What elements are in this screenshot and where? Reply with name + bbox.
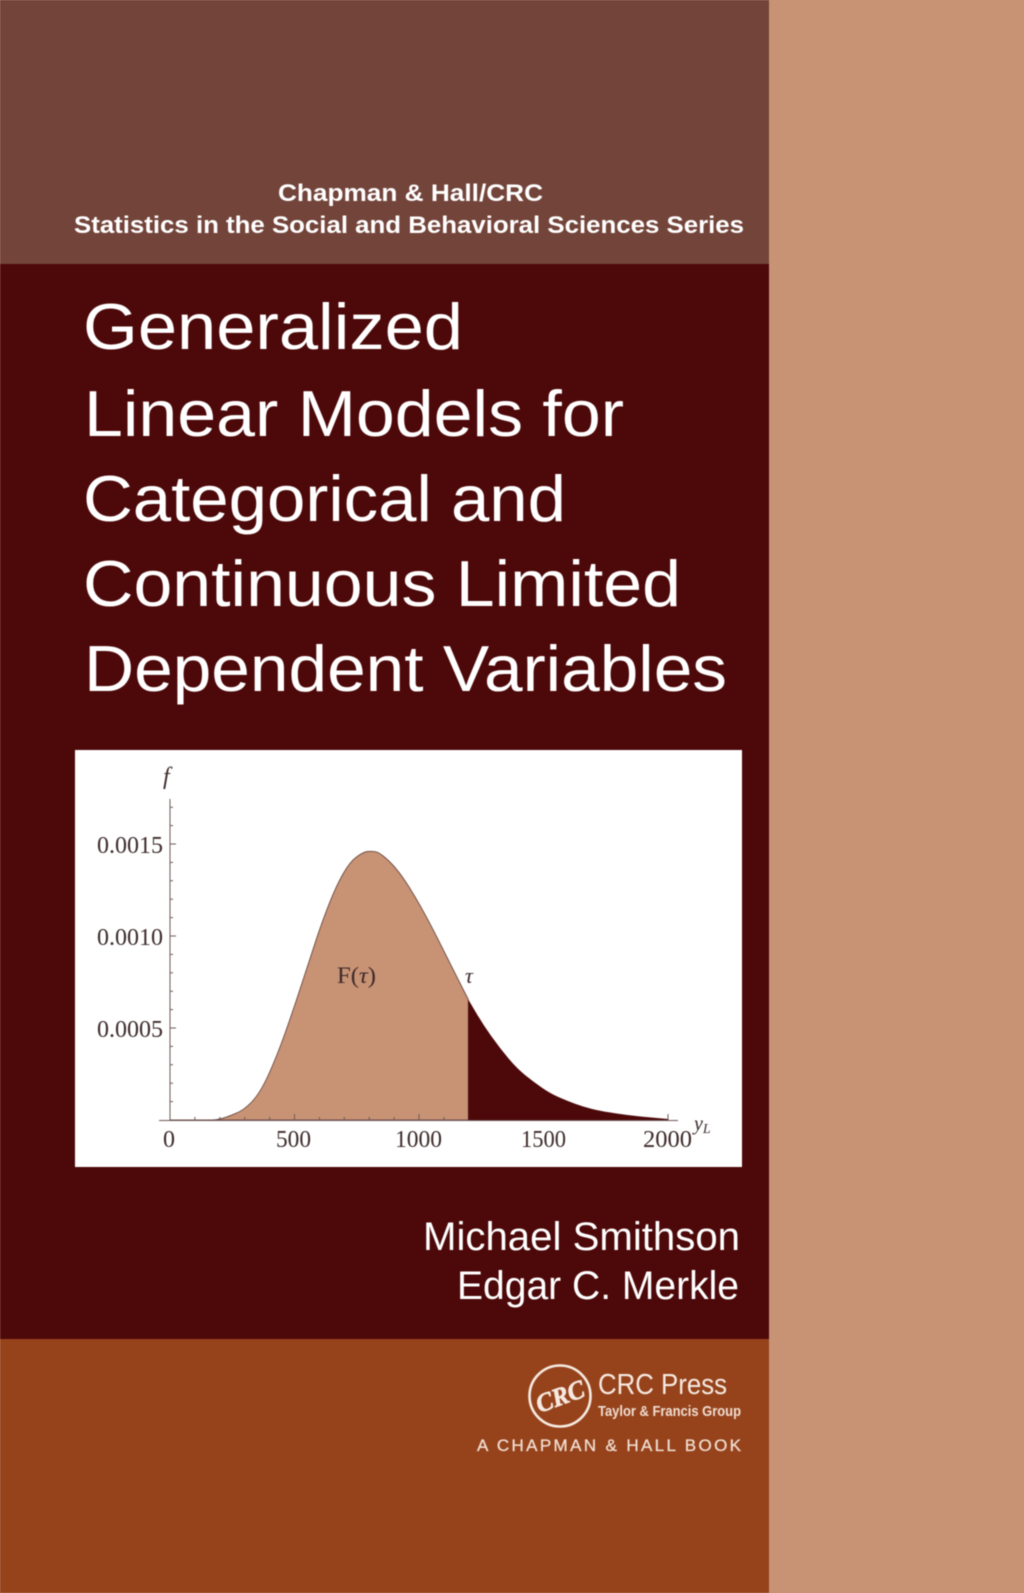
series name: Chapman & Hall/CRC (278, 180, 543, 207)
label: tau: τ (465, 963, 474, 988)
publisher group: Taylor & Francis Group (598, 1403, 741, 1420)
series name: Statistics in the Social and Behavioral Sciences Series (74, 212, 744, 239)
axis title: f: f (163, 764, 173, 790)
axes (159, 799, 678, 1120)
area: upper tail (468, 1000, 668, 1120)
authors: Michael Smithson (423, 1215, 740, 1259)
authors (423, 1215, 740, 1308)
title: Continuous Limited (83, 547, 681, 620)
axis title: y sub L: L (702, 1122, 711, 1137)
y axis labels: 0.0010 (97, 925, 163, 951)
authors: Edgar C. Merkle (457, 1264, 739, 1308)
publisher name: CRC Press (598, 1369, 727, 1401)
panel: header band (0, 0, 769, 264)
chart: density curve panel (75, 750, 742, 1167)
title: Generalized (83, 290, 463, 363)
panel: footer band (0, 1339, 769, 1593)
title: Linear Models for (84, 377, 624, 450)
label: F(tau): F(τ) (337, 963, 376, 988)
panel: right tan strip (769, 0, 1024, 1593)
x axis labels: 1000 (395, 1127, 442, 1153)
x axis labels: 500 (276, 1127, 311, 1153)
title: Categorical and (83, 462, 566, 535)
series name (74, 180, 744, 239)
y axis labels: 0.0005 (97, 1017, 163, 1043)
title: Dependent Variables (84, 632, 727, 705)
area: F(tau) under the curve (170, 851, 468, 1120)
x axis labels: 1500 (521, 1127, 566, 1153)
x axis labels (163, 1127, 692, 1153)
icon: CRC logo: CRC (532, 1374, 589, 1419)
x axis labels: 0 (163, 1127, 175, 1153)
x axis labels: 2000 (643, 1127, 692, 1153)
y axis labels (97, 833, 163, 1043)
y axis labels: 0.0015 (97, 833, 163, 859)
axis title: y sub L: y (694, 1113, 703, 1135)
title (83, 290, 727, 705)
panel: main maroon area (0, 264, 769, 1339)
imprint line: A CHAPMAN & HALL BOOK (477, 1436, 742, 1455)
